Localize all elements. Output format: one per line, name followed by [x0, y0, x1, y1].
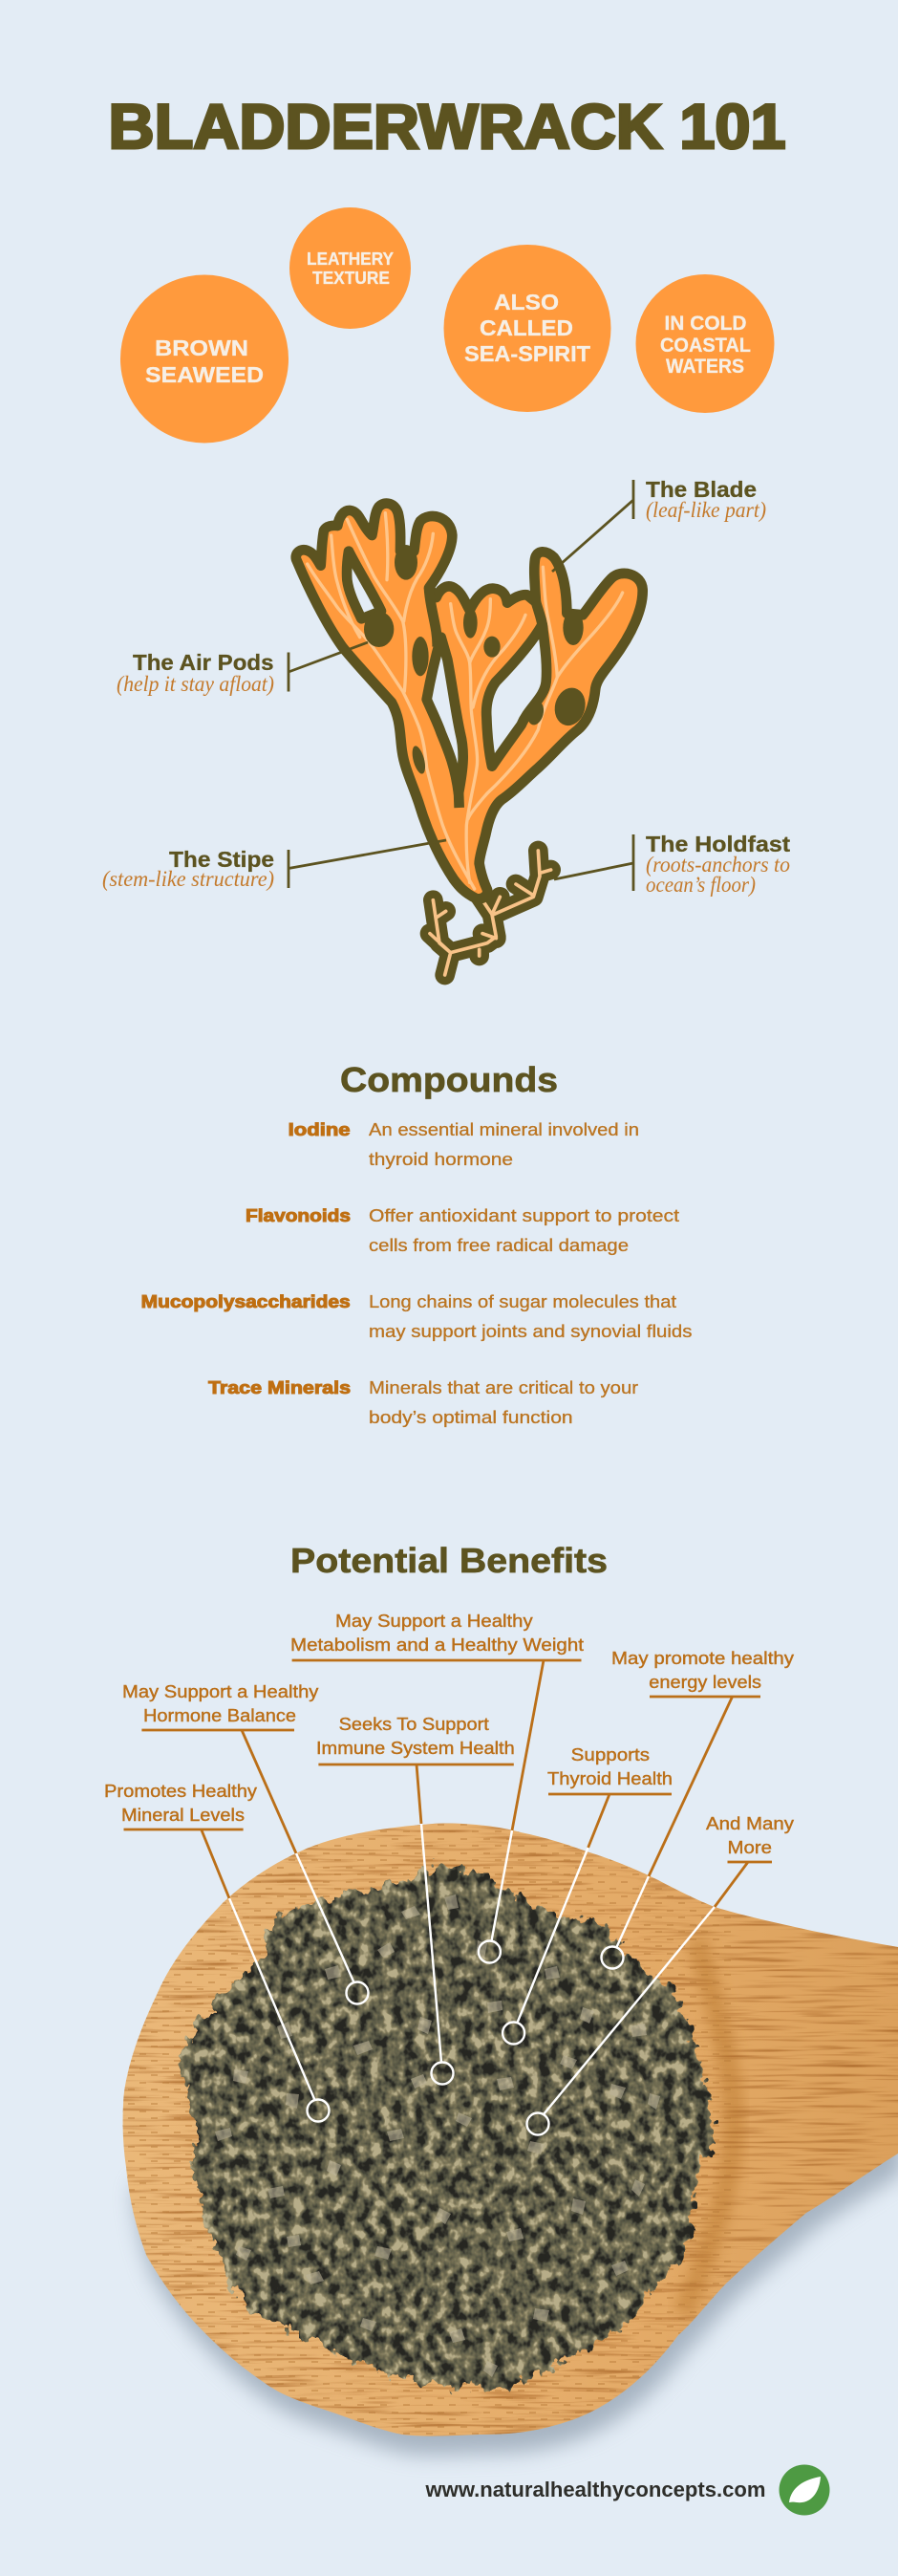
- bowl ridge shading: [683, 1940, 734, 2313]
- benefit callout: hormone balance: May Support a Healthy: [122, 1682, 318, 1701]
- spoon shadow: [134, 2074, 898, 2456]
- bubble: in cold coastal waters: [636, 274, 774, 413]
- spoon body: [123, 1823, 898, 2436]
- spoon pore dashes: [119, 1821, 731, 2437]
- compound: mucopolysaccharides: [141, 1291, 692, 1341]
- bubble: also called sea-spirit: [443, 245, 611, 412]
- benefit callout: immune system health: Immune System Health: [316, 1739, 515, 1758]
- benefit callout: energy levels: [602, 1649, 794, 1969]
- benefit callout: and many more: And Many: [706, 1814, 794, 1833]
- frond body: [296, 504, 643, 898]
- anatomy callout: the air pods: The Air Pods: [133, 650, 273, 675]
- benefit callout: immune system health: Seeks To Support: [339, 1715, 489, 1734]
- bubble: also called sea-spirit: SEA-SPIRIT: [464, 341, 590, 366]
- compound: iodine: Iodine: [289, 1119, 351, 1139]
- holdfast roots: [430, 851, 551, 975]
- benefit callout: hormone balance: Hormone Balance: [143, 1706, 296, 1725]
- title: BLADDERWRACK 101: [109, 91, 785, 162]
- anatomy callout: the holdfast: ocean’s floor): [646, 873, 756, 897]
- anatomy callout: the stipe: The Stipe: [169, 847, 274, 872]
- compound: trace minerals: Minerals that are critical to your: [369, 1377, 638, 1397]
- benefit callout: promotes healthy mineral levels: Mineral Levels: [121, 1806, 245, 1825]
- bubble: brown seaweed: SEAWEED: [145, 362, 264, 387]
- compound: flavonoids: cells from free radical damage: [369, 1235, 629, 1255]
- logo: green leaf badge: [780, 2464, 829, 2516]
- compound: mucopolysaccharides: may support joints and synovial fluids: [369, 1321, 692, 1341]
- benefit callout: thyroid health: Supports: [571, 1745, 650, 1764]
- benefit callout: immune system health: [316, 1715, 515, 2084]
- benefit callout: metabolism and healthy weight: May Support a Healthy: [335, 1612, 533, 1631]
- compound: flavonoids: [246, 1205, 679, 1255]
- compound: flavonoids: Flavonoids: [246, 1205, 351, 1225]
- benefit callout: hormone balance: [122, 1682, 369, 2003]
- website url: www.naturalhealthyconcepts.com: [424, 2478, 766, 2501]
- bubble: brown seaweed: BROWN: [155, 336, 248, 360]
- bubble: leathery texture: TEXTURE: [312, 268, 390, 288]
- veins: [308, 513, 623, 889]
- compound: iodine: An essential mineral involved in: [369, 1119, 639, 1139]
- compound: mucopolysaccharides: Mucopolysaccharides: [141, 1291, 351, 1311]
- benefit callout: thyroid health: Thyroid Health: [547, 1769, 673, 1788]
- anatomy callout: the blade: (leaf-like part): [646, 498, 766, 522]
- bubble: in cold coastal waters: WATERS: [666, 356, 744, 378]
- benefit callout: energy levels: May promote healthy: [611, 1649, 794, 1668]
- bubble: also called sea-spirit: ALSO: [494, 290, 559, 314]
- flakes pile: [180, 1864, 715, 2390]
- bladderwrack illustration: [296, 504, 643, 975]
- anatomy callout: the stipe: [102, 840, 446, 891]
- pale flake highlights: [215, 1894, 660, 2377]
- anatomy callout: the holdfast: [554, 832, 790, 897]
- benefit callout: and many more: [527, 1814, 794, 2135]
- bubble: in cold coastal waters: IN COLD: [665, 313, 747, 335]
- compound: iodine: thyroid hormone: [369, 1149, 513, 1169]
- compounds heading: Compounds: [340, 1060, 558, 1099]
- anatomy callout: the holdfast: (roots-anchors to: [646, 853, 790, 877]
- anatomy callout: the holdfast: The Holdfast: [646, 832, 790, 856]
- benefit callout: metabolism and healthy weight: [290, 1612, 584, 1963]
- benefit callout: and many more: More: [728, 1838, 772, 1857]
- anatomy callout: the air pods: (help it stay afloat): [117, 672, 274, 696]
- compound: trace minerals: [208, 1377, 638, 1427]
- compound: trace minerals: Trace Minerals: [208, 1377, 351, 1397]
- air pods: [364, 545, 589, 775]
- compound: trace minerals: body’s optimal function: [369, 1407, 573, 1427]
- bubble: brown seaweed: [120, 275, 289, 444]
- anatomy callout: the blade: The Blade: [646, 477, 757, 502]
- bubble: in cold coastal waters: COASTAL: [660, 335, 751, 357]
- potential benefits heading: Potential Benefits: [290, 1541, 608, 1580]
- benefit callout: promotes healthy mineral levels: Promotes Healthy: [104, 1782, 257, 1801]
- compound: mucopolysaccharides: Long chains of sugar molecules that: [369, 1291, 676, 1311]
- compounds list: [141, 1119, 692, 1427]
- benefit callout: energy levels: energy levels: [649, 1673, 761, 1692]
- benefit callout: thyroid health: [502, 1745, 673, 2044]
- anatomy callout: the stipe: (stem-like structure): [102, 867, 274, 891]
- compound: flavonoids: Offer antioxidant support to protect: [369, 1205, 679, 1225]
- inner dark walls: [429, 588, 543, 808]
- wooden spoon with bladderwrack flakes: [119, 1821, 898, 2456]
- compound: iodine: [289, 1119, 639, 1169]
- bubble: also called sea-spirit: CALLED: [480, 315, 573, 340]
- anatomy callout: the air pods: [117, 642, 368, 696]
- bubble: leathery texture: [289, 207, 411, 329]
- bubble: leathery texture: LEATHERY: [307, 249, 395, 269]
- fact bubbles: [120, 207, 774, 444]
- gaps between branches: [347, 552, 546, 793]
- benefit callout: promotes healthy mineral levels: [104, 1782, 329, 2122]
- benefit callout: metabolism and healthy weight: Metabolism and a Healthy Weight: [290, 1635, 584, 1655]
- anatomy callout: the blade: [552, 477, 766, 572]
- spoon grain: [123, 1823, 898, 2436]
